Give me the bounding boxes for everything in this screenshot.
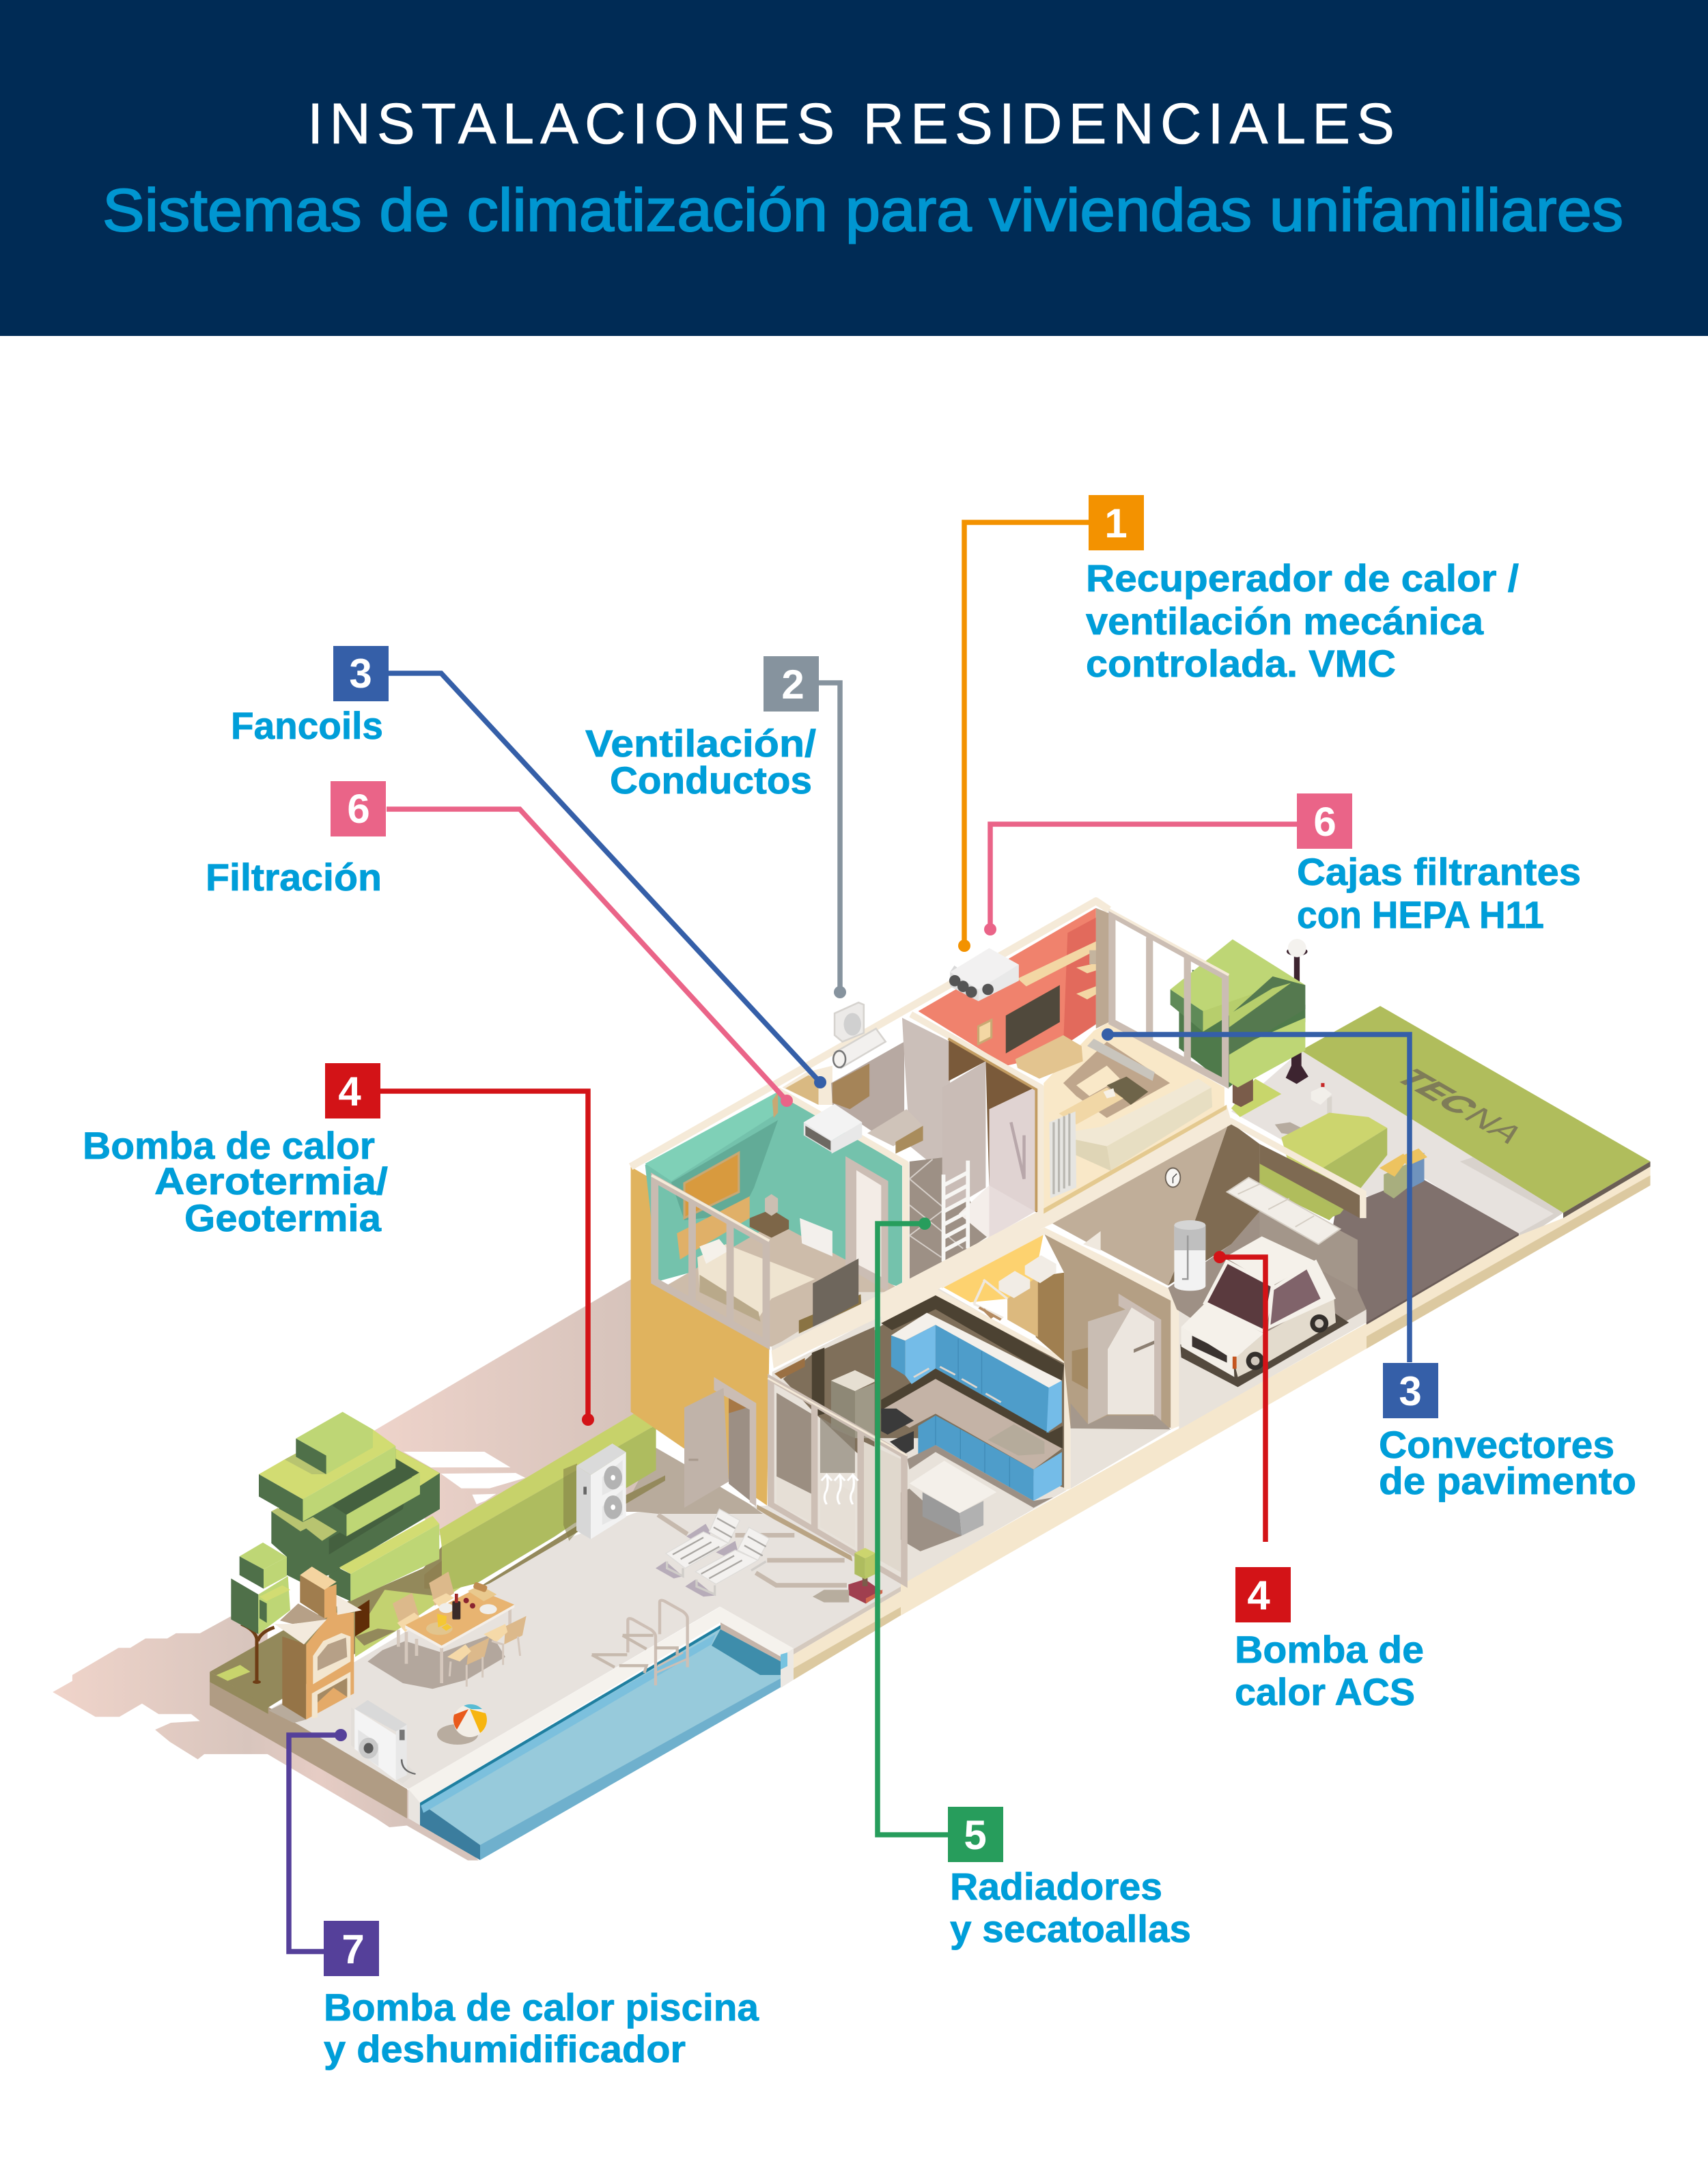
hedge: [424, 1413, 665, 1592]
callout 4: ACS heat pump: [1214, 1251, 1424, 1713]
label: ventilación mecánica: [1086, 600, 1484, 643]
label: Ventilación/: [585, 722, 816, 765]
VMC heat recovery unit: [949, 948, 1019, 1001]
side bands: [794, 1584, 905, 1655]
TECNA logo: NA: [1455, 1103, 1532, 1148]
label: [1297, 850, 1581, 936]
TECNA logo: TEC: [1388, 1065, 1485, 1121]
back walls: [783, 1327, 875, 1469]
label: [1379, 1423, 1636, 1502]
street, lawn and driveway: [1171, 939, 1651, 1349]
callout 6: filter boxes: 6: [1313, 799, 1336, 845]
bed: [697, 1244, 815, 1319]
label: Radiadores: [950, 1865, 1162, 1908]
trees and outdoor furniture: [231, 1412, 527, 1719]
band between floors: [772, 1105, 1231, 1368]
big tree: [259, 1412, 440, 1637]
callout 3: fancoils: 3: [349, 651, 372, 696]
mailbox: [1275, 1083, 1332, 1134]
radiator: [800, 1218, 832, 1256]
callout 3: fancoils: [231, 646, 826, 1088]
small tree: [231, 1543, 290, 1684]
callout 4: ACS heat pump: 4: [1247, 1573, 1270, 1618]
convector: [1087, 1039, 1155, 1081]
pool ladder: [592, 1601, 688, 1685]
water heater ACS: [1174, 1220, 1205, 1291]
aerothermal heat pump: [563, 1444, 626, 1541]
window: [1112, 914, 1225, 1083]
window: [655, 1179, 766, 1344]
label: y secatoallas: [950, 1907, 1191, 1950]
garage floor: [1179, 1257, 1367, 1429]
floor under tv: [772, 1286, 902, 1366]
tree right: [1171, 940, 1305, 1117]
label: [324, 1986, 759, 2070]
painting: [684, 1153, 739, 1218]
subtitle: Sistemas de climatización para viviendas unifamiliares: [102, 176, 1623, 244]
hob: [881, 1409, 914, 1435]
pool heat pump: [351, 1700, 416, 1784]
shelves: [1018, 940, 1105, 987]
callout 5: radiators: [878, 1217, 1191, 1950]
label: Bomba de calor piscina: [324, 1986, 759, 2029]
callout 3: floor convectors: 3: [1399, 1368, 1422, 1414]
base units: [918, 1416, 1033, 1501]
closet door: [1119, 1293, 1161, 1426]
duct and vent: [833, 1002, 886, 1068]
side wall: [1259, 1144, 1360, 1218]
sun loungers: [656, 1504, 852, 1603]
tv: [1006, 985, 1060, 1054]
dining table: [367, 1572, 527, 1689]
label: [1086, 557, 1519, 685]
side door: [1083, 1231, 1101, 1251]
callout 4: aerothermal heat pump: [83, 1063, 594, 1426]
label: y deshumidificador: [324, 2027, 686, 2070]
closet: [940, 1227, 1179, 1489]
label: Conductos: [610, 759, 812, 802]
label: [1235, 1628, 1424, 1713]
fridge: [831, 1381, 855, 1438]
label: controlada. VMC: [1086, 642, 1396, 685]
callout 5: radiators: 5: [964, 1812, 987, 1858]
patio floor and pool: [210, 1323, 1367, 1860]
label: de pavimento: [1379, 1459, 1636, 1502]
garage: [1044, 1118, 1367, 1429]
walls: [881, 1289, 1071, 1491]
label: [83, 1124, 388, 1239]
potted plant: [848, 1548, 882, 1603]
nightstand: [750, 1209, 789, 1238]
teal room: [645, 1092, 902, 1347]
beach ball: [437, 1704, 487, 1745]
ground shadow: [53, 1279, 651, 1860]
callout 7: pool heat pump: [289, 1729, 759, 2070]
kitchen: [875, 1290, 1066, 1536]
worktop: [881, 1379, 1062, 1469]
label: calor ACS: [1235, 1670, 1415, 1713]
living room: [919, 908, 1229, 1211]
patio surface: [268, 1502, 905, 1789]
sink: [988, 1424, 1044, 1456]
pavement: [1231, 1050, 1563, 1240]
callout 3: floor convectors: [1102, 1028, 1636, 1502]
title: INSTALACIONES RESIDENCIALES: [307, 91, 1395, 156]
floor: [1044, 1022, 1224, 1211]
walls top: [631, 901, 1109, 1290]
label: Fancoils: [231, 704, 383, 747]
label: con HEPA H11: [1297, 893, 1544, 936]
floors: [768, 1286, 1066, 1583]
ramp: [1460, 1157, 1563, 1242]
callout 6: filter boxes: [984, 793, 1581, 936]
label: [950, 1865, 1191, 1950]
sofa: [1076, 1079, 1212, 1153]
TECNA logo: [1388, 1065, 1532, 1148]
back wall: [1050, 1121, 1229, 1286]
radiator: [1050, 1112, 1076, 1198]
callout 1: heat recovery: [958, 495, 1519, 952]
hedge front: [1281, 1113, 1387, 1218]
barbecue: [275, 1566, 362, 1719]
front door: [684, 1377, 756, 1508]
pool: [408, 1625, 781, 1860]
coping: [408, 1607, 794, 1803]
ceiling door: [1227, 1178, 1340, 1244]
clock: [1166, 1168, 1180, 1187]
side of plot: [210, 1672, 407, 1818]
floor: [662, 1222, 902, 1347]
view through garage door: [1259, 1162, 1338, 1220]
label: [585, 722, 816, 802]
side band: [1367, 1167, 1651, 1349]
label: Recuperador de calor /: [1086, 557, 1519, 600]
towel radiator: [944, 1161, 968, 1262]
garden plate: [210, 1545, 469, 1723]
callout 7: pool heat pump: 7: [341, 1926, 365, 1972]
callout 6: filtration: [206, 781, 793, 1107]
label: Convectores: [1379, 1423, 1614, 1466]
upper units: [905, 1325, 936, 1384]
island: [923, 1492, 962, 1536]
headboard: [677, 1196, 750, 1259]
door: [845, 1156, 888, 1292]
callout 1: heat recovery: 1: [1104, 501, 1128, 546]
lawn: [1301, 1006, 1651, 1213]
under-house shadow: [626, 1448, 763, 1514]
label: Bomba de: [1235, 1628, 1424, 1671]
callout 2: ventilation: [585, 656, 846, 998]
label: Aerotermia/: [154, 1159, 388, 1202]
callout 4: aerothermal heat pump: 4: [338, 1069, 361, 1114]
car: [1180, 1237, 1349, 1387]
house upper floor: [631, 901, 1229, 1508]
yellow facade: [631, 1167, 769, 1506]
bathroom: [783, 1017, 1039, 1288]
label: Filtración: [206, 856, 382, 899]
side wall: [1096, 908, 1109, 1028]
callout 2: ventilation: 2: [781, 662, 804, 707]
fancoil: [804, 1104, 862, 1153]
heat arrows: [822, 1475, 858, 1504]
header band: [0, 0, 1708, 336]
callout 6: filtration: 6: [347, 786, 370, 832]
house lower floor: [768, 1227, 1179, 1603]
label: Geotermia: [184, 1196, 382, 1239]
driveway: [1325, 1177, 1519, 1325]
label: Bomba de calor: [83, 1124, 375, 1167]
sliding door: [768, 1378, 907, 1583]
rubbish bins: [1380, 1149, 1427, 1198]
tv: [799, 1294, 862, 1341]
lamp post: [1286, 939, 1308, 1084]
label: Cajas filtrantes: [1297, 850, 1581, 893]
